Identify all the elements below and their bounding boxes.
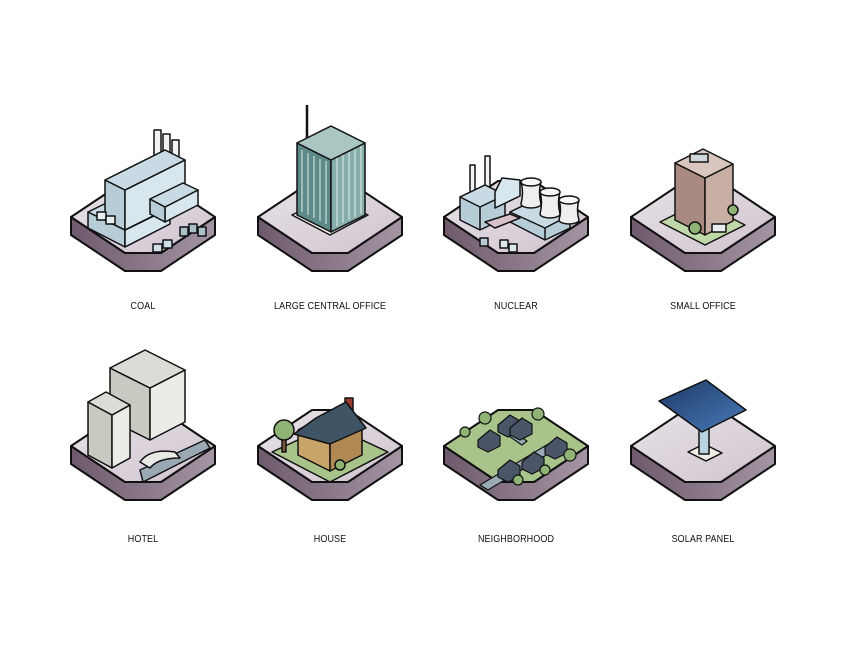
icon: small office building [660,149,745,245]
icon: coal plant [88,130,206,252]
tile: coal [71,130,215,271]
icon: office tower [292,105,368,235]
label: nuclear: NUCLEAR [494,301,538,312]
label: solar panel: SOLAR PANEL [672,534,734,545]
tile: large central office [258,105,402,271]
icon: house [272,398,388,482]
tile: nuclear [444,156,588,271]
tile: house [258,398,402,500]
icon: nuclear plant [460,156,579,252]
label: house: HOUSE [314,534,346,545]
label: neighborhood: NEIGHBORHOOD [478,534,554,545]
tile: neighborhood [444,408,588,500]
tile: small office [631,149,775,271]
tile: hotel [71,350,215,500]
icon: neighborhood [460,408,576,490]
tile: solar panel [631,380,775,500]
label: small office: SMALL OFFICE [670,301,736,312]
label: hotel: HOTEL [128,534,158,545]
label: large central office: LARGE CENTRAL OFFICE [274,301,386,312]
icon: hotel [88,350,210,482]
icon: solar panel [659,380,746,461]
label: coal: COAL [131,301,155,312]
